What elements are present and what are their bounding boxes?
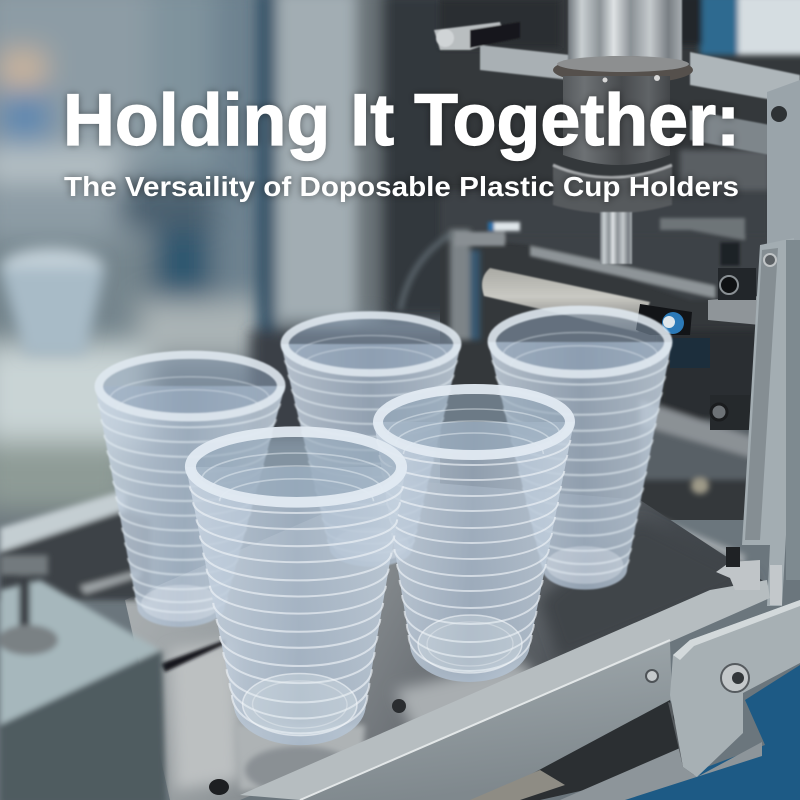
clamp on rail bbox=[716, 547, 782, 605]
plastic cup: back right bbox=[487, 310, 677, 590]
column and clamps at right bbox=[708, 80, 800, 606]
front rail bbox=[240, 580, 770, 800]
plastic cup: front left bbox=[185, 432, 410, 745]
subtitle: The Versaility of Doposable Plastic Cup Holders bbox=[64, 171, 739, 202]
plastic cup: back middle bbox=[281, 315, 461, 567]
title: Holding It Together: bbox=[63, 80, 740, 161]
plastic cup: front right bbox=[369, 389, 575, 682]
corner bracket with bolt bbox=[670, 600, 800, 777]
blurred background cup bbox=[0, 248, 105, 355]
air cylinder rod bbox=[482, 268, 710, 368]
background machinery upper right bbox=[400, 0, 800, 565]
press cylinder bbox=[553, 0, 693, 264]
title block bbox=[63, 80, 740, 202]
frame bars behind press bbox=[434, 22, 800, 155]
title: Holding It Together: bbox=[63, 80, 740, 161]
plastic cup: back left bbox=[85, 355, 286, 627]
subtitle: The Versaility of Doposable Plastic Cup Holders bbox=[64, 171, 739, 202]
conveyor bed bbox=[125, 480, 765, 800]
foreground steel block, blurred bbox=[0, 555, 166, 800]
blue machine base bbox=[620, 665, 800, 800]
rear left rail bbox=[0, 490, 150, 600]
